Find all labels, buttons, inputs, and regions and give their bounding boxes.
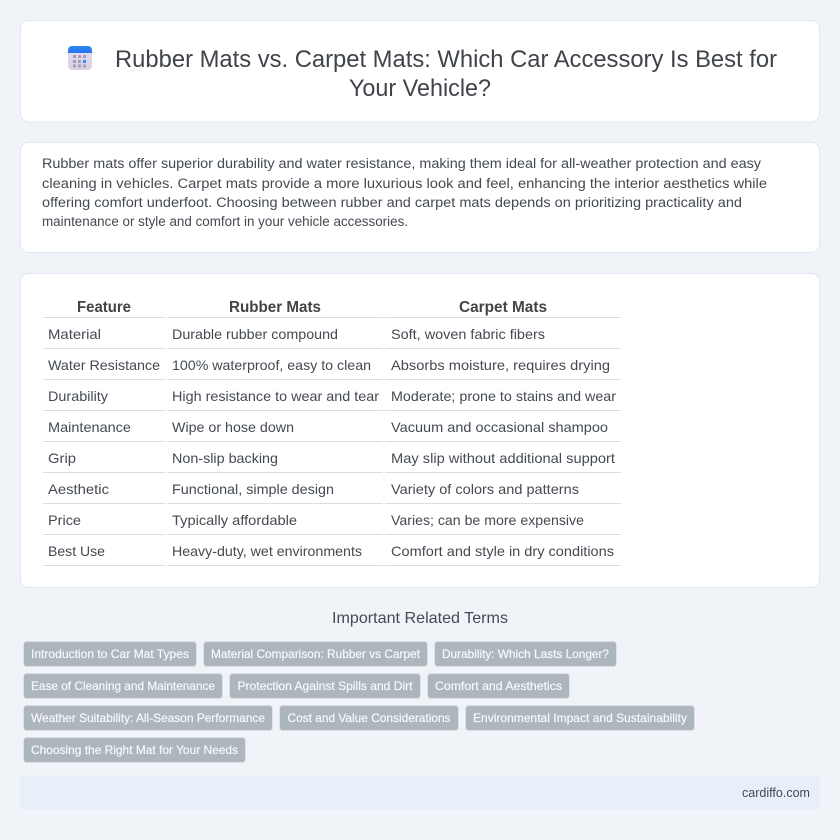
row: maintenance: Maintenance bbox=[48, 419, 131, 435]
row: durability bbox=[48, 388, 616, 404]
tag bbox=[24, 642, 196, 666]
icon: calendar bbox=[68, 46, 92, 70]
row: best use bbox=[48, 543, 614, 559]
text block: summary: offering comfort underfoot. Choosing between rubber and carpet mats depends on prioritizing practicality and bbox=[42, 195, 742, 211]
row: price bbox=[48, 512, 584, 528]
tag bbox=[24, 706, 272, 730]
row: grip: May slip without additional support bbox=[391, 450, 615, 466]
panel: title card bbox=[20, 20, 820, 122]
row: grip: Non-slip backing bbox=[172, 450, 278, 466]
row: price: Typically affordable bbox=[172, 512, 297, 528]
tag bbox=[434, 642, 616, 666]
tag bbox=[280, 706, 458, 730]
row: durability: Moderate; prone to stains and wear bbox=[391, 388, 616, 404]
row: price: Varies; can be more expensive bbox=[391, 512, 584, 528]
tag bbox=[428, 674, 570, 698]
row: water resistance: 100% waterproof, easy to clean bbox=[172, 357, 371, 373]
tag: Weather Suitability: All-Season Performance bbox=[31, 711, 265, 725]
tag: Choosing the Right Mat for Your Needs bbox=[31, 743, 238, 757]
row: best use: Comfort and style in dry conditions bbox=[391, 543, 614, 559]
tag bbox=[24, 738, 246, 762]
title: Your Vehicle? bbox=[349, 75, 491, 102]
row: water resistance: Absorbs moisture, requires drying bbox=[391, 357, 610, 373]
table header: Rubber Mats bbox=[229, 299, 321, 316]
tag: Environmental Impact and Sustainability bbox=[473, 711, 687, 725]
row: material: Material bbox=[48, 326, 101, 342]
footer bbox=[20, 776, 820, 810]
text block: summary: Rubber mats offer superior durability and water resistance, making them ideal for all-weather protection and easy bbox=[42, 156, 762, 172]
row: aesthetic: Aesthetic bbox=[48, 481, 109, 497]
row: best use: Best Use bbox=[48, 543, 105, 559]
tag: Cost and Value Considerations bbox=[288, 711, 450, 725]
tag bbox=[230, 674, 420, 698]
title: Rubber Mats vs. Carpet Mats: Which Car Accessory Is Best for bbox=[115, 46, 777, 73]
footer: cardiffo.com bbox=[742, 786, 810, 800]
text block: summary: maintenance or style and comfort in your vehicle accessories. bbox=[42, 214, 408, 230]
table header: Carpet Mats bbox=[459, 299, 547, 316]
tag bbox=[204, 642, 428, 666]
row: grip: Grip bbox=[48, 450, 76, 466]
row: water resistance: Water Resistance bbox=[48, 357, 160, 373]
row: price: Price bbox=[48, 512, 81, 528]
tag bbox=[466, 706, 694, 730]
row: durability: High resistance to wear and tear bbox=[172, 388, 379, 404]
row: aesthetic bbox=[48, 481, 579, 497]
row: aesthetic: Functional, simple design bbox=[172, 481, 334, 497]
tag: Protection Against Spills and Dirt bbox=[238, 679, 413, 693]
tag: Material Comparison: Rubber vs Carpet bbox=[211, 647, 421, 661]
row: water resistance bbox=[48, 357, 610, 373]
row: maintenance: Wipe or hose down bbox=[172, 419, 294, 435]
row: maintenance: Vacuum and occasional shampoo bbox=[391, 419, 608, 435]
tag bbox=[24, 674, 222, 698]
row: material: Soft, woven fabric fibers bbox=[391, 326, 545, 342]
text block: summary: cleaning in vehicles. Carpet mats provide a more luxurious look and feel, enhancing the interior aesthetics while bbox=[42, 176, 767, 192]
table header: Feature bbox=[77, 299, 131, 316]
row: maintenance bbox=[48, 419, 608, 435]
tags: related terms bbox=[24, 642, 694, 762]
table header bbox=[77, 299, 547, 316]
row: material bbox=[48, 326, 545, 342]
row: aesthetic: Variety of colors and patterns bbox=[391, 481, 579, 497]
tag: Introduction to Car Mat Types bbox=[31, 647, 189, 661]
heading: related terms: Important Related Terms bbox=[332, 610, 508, 627]
panel: summary paragraph bbox=[20, 142, 820, 252]
title bbox=[115, 46, 777, 102]
row: durability: Durability bbox=[48, 388, 108, 404]
text block: summary bbox=[42, 156, 767, 230]
tag: Ease of Cleaning and Maintenance bbox=[31, 679, 215, 693]
row: material: Durable rubber compound bbox=[172, 326, 338, 342]
tag: Comfort and Aesthetics bbox=[435, 679, 562, 693]
panel: comparison table bbox=[20, 274, 820, 588]
tag: Durability: Which Lasts Longer? bbox=[442, 647, 609, 661]
row: best use: Heavy-duty, wet environments bbox=[172, 543, 362, 559]
row: grip bbox=[48, 450, 615, 466]
